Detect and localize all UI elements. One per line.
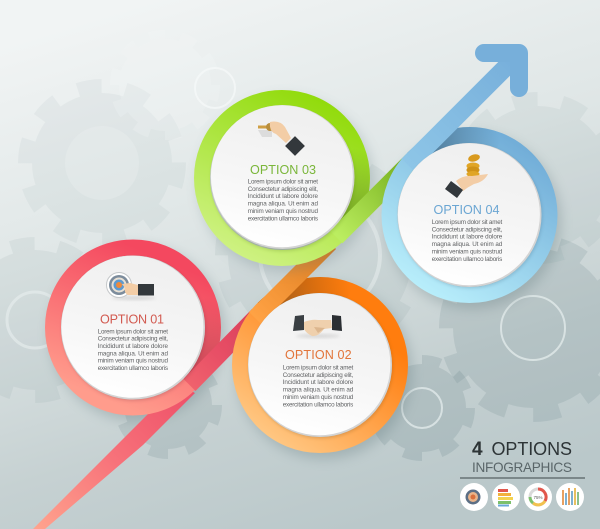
red ribbon lower <box>33 384 195 529</box>
green ribbon <box>336 161 412 237</box>
gear rings <box>7 68 565 428</box>
ring fold shade <box>264 285 350 308</box>
text block: Consectetur adipiscing elit, <box>98 336 168 343</box>
text block: magna aliqua. Ut enim ad <box>283 387 354 394</box>
text block: Consectetur adipiscing elit, <box>283 372 354 379</box>
disc <box>61 256 206 401</box>
gear: right large <box>447 242 600 414</box>
text block <box>283 364 354 408</box>
text block: Consectetur adipiscing elit, <box>432 226 503 233</box>
arrow <box>408 53 519 165</box>
red ring <box>53 248 213 408</box>
orange ring <box>240 285 400 445</box>
text block: magna aliqua. Ut enim ad <box>98 350 168 357</box>
text block <box>248 178 318 222</box>
heading: option 01: OPTION 01 <box>100 312 164 326</box>
subtitle: INFOGRAPHICS <box>472 460 572 475</box>
ring fold shade <box>338 148 362 234</box>
blue ring <box>390 135 550 295</box>
ring shadow <box>49 245 225 421</box>
icon: handshake <box>293 315 342 338</box>
heading: option 04: OPTION 04 <box>434 203 500 217</box>
gear: small lower <box>374 360 470 456</box>
gear: top right <box>460 100 600 256</box>
title: 4 options: 4 <box>472 439 483 460</box>
panel: option 03 <box>198 96 412 272</box>
text block: minim veniam quis nostrud <box>283 394 354 401</box>
gear: top left <box>26 87 178 239</box>
icon: target <box>460 483 488 511</box>
icon: hand with coins <box>445 153 488 198</box>
icon: target and hand <box>106 272 156 300</box>
heading: option 02: OPTION 02 <box>285 348 352 362</box>
gear: below option 01 <box>120 357 216 453</box>
divider <box>460 478 585 479</box>
text block <box>98 328 168 372</box>
arrow shaft <box>408 54 519 165</box>
text block: Consectetur adipiscing elit, <box>248 186 318 193</box>
text block: Lorem ipsum dolor sit amet <box>432 219 503 226</box>
text block: magna aliqua. Ut enim ad <box>248 201 318 208</box>
text block: Incididunt ut labore dolore <box>98 343 168 350</box>
panel: option 01 <box>33 245 264 529</box>
text block: Incididunt ut labore dolore <box>432 234 503 241</box>
icon: bar chart <box>556 483 584 511</box>
background gears <box>0 35 600 456</box>
ring shadow <box>385 133 561 309</box>
text block: Lorem ipsum dolor sit amet <box>248 178 318 186</box>
text block: Incididunt ut labore dolore <box>248 193 318 200</box>
panel: option 04 <box>385 53 561 309</box>
text block: exercitation ullamco laboris <box>248 215 318 222</box>
disc <box>398 143 542 288</box>
icon: donut chart: 75% <box>533 495 543 500</box>
text block: Incididunt ut labore dolore <box>283 379 354 386</box>
text block: minim veniam quis nostrud <box>248 208 318 215</box>
red ribbon upper <box>184 309 264 391</box>
disc <box>248 293 393 438</box>
text block: exercitation ullamco laboris <box>432 256 502 263</box>
text block: Lorem ipsum dolor sit amet <box>283 364 354 372</box>
gear: left <box>0 244 111 396</box>
ring fold shade <box>190 298 213 384</box>
ring fold shade <box>413 135 500 158</box>
text block: Lorem ipsum dolor sit amet <box>98 328 168 335</box>
ring shadow <box>236 283 412 459</box>
green ring <box>202 98 362 258</box>
gear hub: top left <box>65 126 139 200</box>
title block <box>460 439 585 511</box>
text block: magna aliqua. Ut enim ad <box>432 241 503 248</box>
disc <box>210 105 355 252</box>
title: options word: OPTIONS <box>492 439 572 459</box>
text block: exercitation ullamco laboris <box>98 365 168 372</box>
text block: exercitation ullamco laboris <box>283 401 353 408</box>
gear: centre <box>222 157 418 353</box>
gear: top middle light <box>115 35 215 135</box>
arrow head <box>484 53 519 88</box>
orange ribbon <box>255 243 330 318</box>
icon: stacked bars <box>492 483 520 511</box>
text block: minim veniam quis nostrud <box>432 248 503 255</box>
panel: option 02 <box>236 243 412 459</box>
ring shadow <box>198 96 374 272</box>
icon: hand with key <box>258 122 305 156</box>
text block: minim veniam quis nostrud <box>98 358 168 365</box>
heading: option 03: OPTION 03 <box>250 163 316 177</box>
text block <box>432 219 503 263</box>
